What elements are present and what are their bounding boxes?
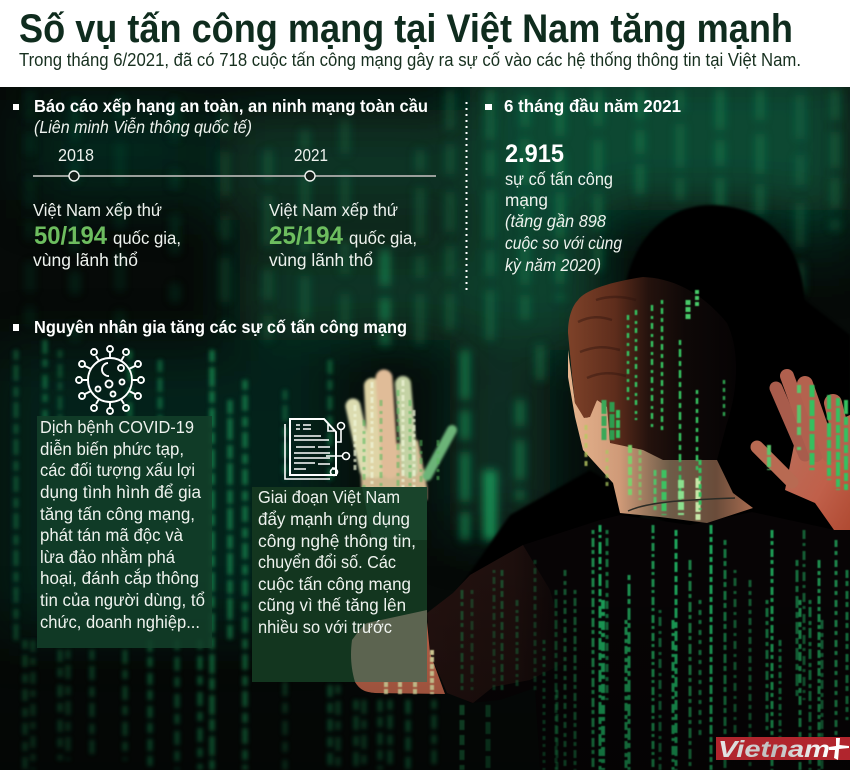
left hand: [353, 378, 452, 694]
callout: digital transformation: nhiều so với trước: [258, 617, 392, 637]
panel: first six months of 2021: 2.915: [505, 140, 564, 168]
heading: Báo cáo xếp hạng an toàn, an ninh mạng toàn cầu: [34, 96, 428, 116]
callout: COVID-19: tin của người dùng, tổ: [40, 590, 205, 610]
panel: first six months of 2021: kỳ năm 2020): [505, 255, 601, 275]
timeline: [33, 145, 436, 181]
panel: causes: [13, 317, 427, 682]
panel: first six months of 2021: cuộc so với cùng: [505, 233, 622, 253]
forearm below the box: [355, 622, 445, 694]
ranking 2021: [269, 200, 417, 270]
ranking 2018: [33, 200, 181, 270]
callout: digital transformation: đẩy mạnh ứng dụng: [258, 509, 410, 529]
icon: coronavirus: [76, 346, 144, 414]
callout: digital transformation: Giai đoạn Việt Nam: [258, 487, 400, 507]
bullet: [13, 104, 19, 110]
ranking 2021: quốc gia,: [349, 228, 417, 248]
bright code on person: [586, 290, 846, 520]
panel: first six months of 2021: 6 tháng đầu năm 2021: [504, 96, 681, 116]
right hand: [757, 376, 850, 530]
hair texture: [578, 297, 636, 378]
sleeve: [427, 545, 550, 703]
ranking 2018: vùng lãnh thổ: [33, 250, 138, 270]
callout: COVID-19: [37, 416, 212, 648]
neck and skin: [568, 350, 753, 523]
timeline: 2021: [294, 145, 328, 165]
callout: COVID-19: diễn biến phức tạp,: [40, 438, 184, 459]
ranking 2018: Việt Nam xếp thứ: [33, 200, 162, 220]
callout: COVID-19: hoại, đánh cắp thông: [40, 567, 199, 588]
panel: first six months of 2021: (tăng gần 898: [505, 211, 606, 231]
callout: digital transformation: cũng vì thế tăng lên: [258, 595, 406, 615]
logo: Vietnam+: [716, 736, 850, 762]
panel: first six months of 2021: sự cố tấn công: [505, 169, 613, 189]
callout: digital transformation: cuộc tấn công mạng: [258, 574, 411, 594]
dark shadows behind person: [471, 204, 849, 572]
ranking 2021: vùng lãnh thổ: [269, 250, 373, 270]
bottom darkening: [21, 598, 849, 770]
ranking 2021: Việt Nam xếp thứ: [269, 200, 398, 220]
panel: first six months of 2021: mạng: [505, 190, 548, 210]
hair: [568, 277, 736, 460]
code on shirt: [462, 525, 847, 770]
callout: digital transformation: công nghệ thông tin,: [258, 531, 416, 551]
ranking 2021: 25/194: [269, 222, 343, 250]
callout: digital transformation: chuyển đổi số. Các: [258, 552, 396, 572]
source: (Liên minh Viễn thông quốc tế): [34, 117, 252, 137]
panel: first six months of 2021: [466, 96, 681, 294]
soft green glow: [0, 60, 850, 630]
logo: Vietnam+: Vietnam: [718, 736, 830, 762]
callout: digital transformation: [252, 487, 427, 682]
heading: Nguyên nhân gia tăng các sự cố tấn công mạng: [34, 317, 407, 337]
left column code: [16, 340, 434, 770]
blurred background code columns: [30, 90, 835, 540]
shirt: [450, 512, 850, 770]
subtitle: Trong tháng 6/2021, đã có 718 cuộc tấn công mạng gây ra sự cố vào các hệ thống thông tin tại Việt Nam.: [19, 50, 801, 70]
necklace: [628, 498, 735, 511]
icon: document with circuit: [285, 419, 350, 479]
panel: global cyber security ranking: [13, 96, 436, 270]
callout: COVID-19: tăng tấn công mạng,: [40, 504, 195, 524]
callout: COVID-19: chức, doanh nghiệp...: [40, 612, 200, 632]
callout: COVID-19: các đối tượng xấu lợi: [40, 460, 195, 480]
callout: COVID-19: Dịch bệnh COVID-19: [40, 417, 194, 437]
timeline: 2018: [58, 145, 94, 165]
callout: COVID-19: dụng tình hình để gia: [40, 482, 201, 502]
callout: COVID-19: phát tán mã độc và: [40, 525, 183, 545]
ranking 2018: quốc gia,: [113, 228, 181, 248]
callout: COVID-19: lừa đảo nhằm phá: [40, 546, 175, 567]
bullet: [13, 324, 19, 331]
ranking 2018: 50/194: [34, 222, 107, 250]
